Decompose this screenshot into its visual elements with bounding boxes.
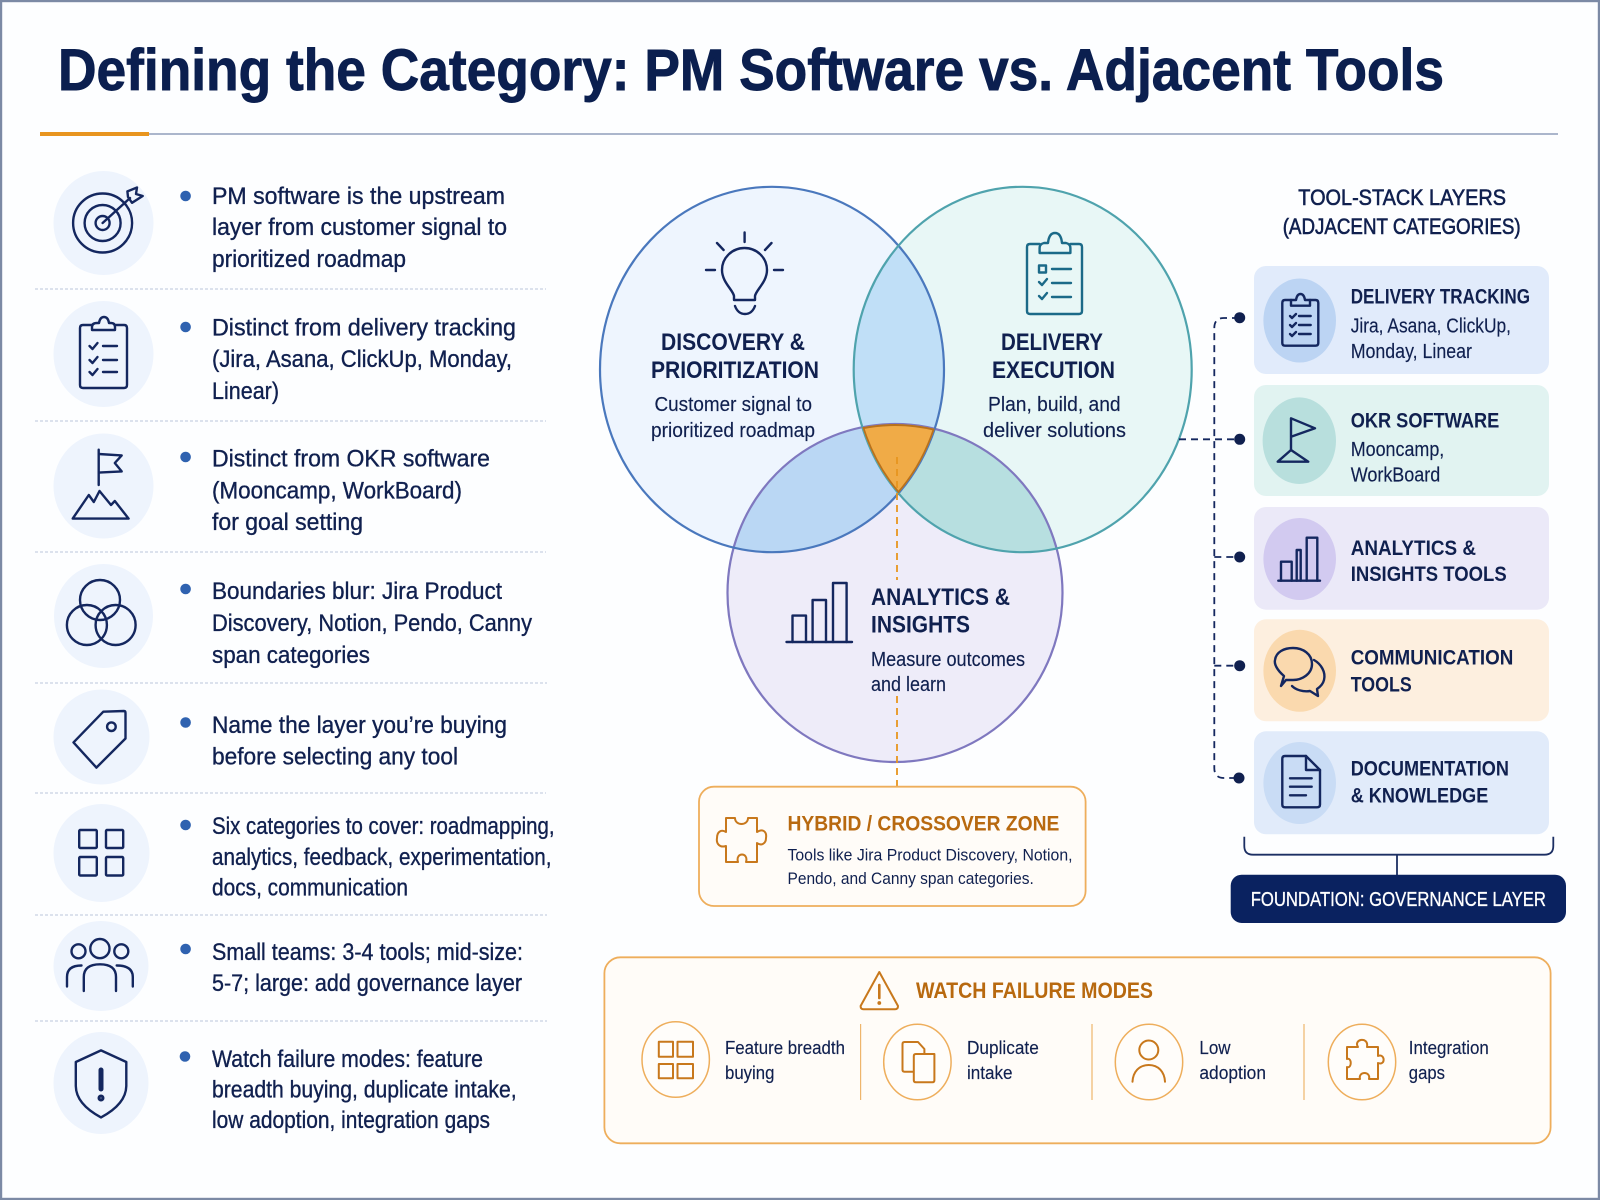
venn: discovery and prioritization: Customer signal to: [654, 394, 812, 416]
point: name the layer: before selecting any tool: [212, 744, 458, 771]
point: upstream layer: PM software is the upstream: [212, 183, 505, 210]
failure mode: duplicate intake: intake: [967, 1062, 1012, 1083]
connector: venn to layer cards: [1179, 312, 1245, 784]
point: OKR software: (Mooncamp, WorkBoard): [212, 478, 462, 505]
point: OKR software: Distinct from OKR software: [212, 446, 490, 472]
icon: four squares grid: [79, 830, 123, 876]
card: communication tools: [1254, 619, 1549, 721]
point: boundaries blur: [54, 564, 532, 669]
failure mode: integration gaps: [1328, 1024, 1489, 1100]
failure mode: low adoption: adoption: [1199, 1062, 1266, 1083]
heading: tool-stack layers: [1283, 185, 1521, 239]
card: delivery tracking: Monday, Linear: [1351, 341, 1472, 363]
failure mode: integration gaps: Integration: [1409, 1037, 1489, 1058]
card: OKR software: Mooncamp,: [1351, 439, 1444, 461]
point: delivery tracking: [54, 301, 516, 407]
point: six categories: [54, 804, 554, 902]
point: failure modes: Watch failure modes: feature: [212, 1046, 483, 1073]
venn: delivery execution: EXECUTION: [992, 357, 1115, 384]
heading: tool-stack layers: TOOL-STACK LAYERS: [1298, 185, 1506, 210]
chart: three-circle venn diagram: [600, 187, 1192, 787]
panel: hybrid crossover zone: Tools like Jira Product Discovery, Notion,: [788, 847, 1072, 865]
card: documentation and knowledge: [1254, 731, 1549, 834]
failure mode: feature breadth buying: buying: [725, 1062, 774, 1083]
venn: analytics and insights: [786, 583, 1025, 696]
icon: flag on mountain: [73, 450, 129, 519]
foundation: governance layer: FOUNDATION: GOVERNANCE LAYER: [1251, 889, 1546, 911]
venn: analytics and insights: Measure outcomes: [871, 649, 1025, 671]
callout connector: overlap to hybrid zone: [896, 457, 898, 787]
icon: bars: [1278, 538, 1320, 581]
point: six categories: docs, communication: [212, 874, 408, 902]
point: upstream layer: [54, 171, 507, 275]
point: failure modes: breadth buying, duplicate intake,: [212, 1076, 517, 1104]
point: boundaries blur: Boundaries blur: Jira Product: [212, 578, 502, 605]
card: communication tools: TOOLS: [1351, 674, 1412, 697]
venn: discovery and prioritization: [651, 232, 819, 442]
panel: hybrid crossover zone: [699, 787, 1086, 906]
card: delivery tracking: DELIVERY TRACKING: [1351, 285, 1530, 308]
point: boundaries blur: span categories: [212, 642, 370, 669]
failure mode: duplicate intake: Duplicate: [967, 1037, 1039, 1058]
icon: duplicate documents: [902, 1042, 934, 1082]
point: name the layer: [54, 690, 507, 784]
icon: light bulb: [706, 232, 783, 314]
failure mode: feature breadth buying: [642, 1022, 845, 1097]
venn: discovery and prioritization: prioritized roadmap: [651, 420, 815, 442]
icon: puzzle piece: [717, 818, 766, 862]
card: documentation and knowledge: & KNOWLEDGE: [1351, 784, 1488, 807]
icon: chat bubbles: [1275, 648, 1324, 696]
icon: target with arrow: [73, 188, 143, 252]
failure mode: low adoption: Low: [1199, 1037, 1231, 1058]
card: OKR software: [1254, 385, 1549, 496]
panel: key points list: [35, 171, 554, 1134]
icon: overlapping circles: [67, 580, 136, 645]
point: failure modes: low adoption, integration gaps: [212, 1107, 490, 1134]
panel: watch failure modes: [604, 957, 1551, 1143]
point: upstream layer: layer from customer signal to: [212, 214, 507, 241]
panel: tool-stack layers: [1179, 185, 1566, 923]
foundation: governance layer: [1231, 875, 1566, 923]
point: six categories: analytics, feedback, experimentation,: [212, 844, 552, 871]
point: upstream layer: prioritized roadmap: [212, 246, 406, 273]
icon: warning triangle: [861, 972, 898, 1009]
panel: hybrid crossover zone: Pendo, and Canny span categories.: [788, 870, 1034, 888]
venn: discovery and prioritization: PRIORITIZATION: [651, 357, 819, 384]
card: communication tools: COMMUNICATION: [1351, 646, 1513, 669]
point: failure modes: [54, 1032, 517, 1134]
failure mode: feature breadth buying: Feature breadth: [725, 1037, 845, 1058]
venn: analytics and insights: and learn: [871, 674, 946, 696]
icon: price tag: [74, 711, 126, 768]
point: boundaries blur: Discovery, Notion, Pendo, Canny: [212, 610, 532, 637]
point: OKR software: for goal setting: [212, 509, 363, 536]
icon: small puzzle piece: [1347, 1040, 1384, 1079]
icon: flag on base: [1278, 418, 1315, 462]
venn: delivery execution: [983, 233, 1126, 442]
icon: document: [1282, 756, 1320, 807]
point: team sizes: Small teams: 3-4 tools; mid-size:: [212, 939, 523, 966]
icon: shield with exclamation: [76, 1050, 126, 1117]
panel: hybrid crossover zone: HYBRID / CROSSOVER ZONE: [788, 813, 1059, 836]
card: documentation and knowledge: DOCUMENTATION: [1351, 757, 1509, 780]
icon: three people: [67, 939, 133, 991]
card: analytics and insights tools: ANALYTICS &: [1351, 537, 1476, 560]
point: team sizes: [54, 921, 523, 1011]
point: team sizes: 5-7; large: add governance layer: [212, 970, 522, 997]
icon: bar chart: [786, 583, 852, 642]
venn: discovery and prioritization: DISCOVERY &: [661, 329, 805, 356]
venn: analytics and insights: ANALYTICS &: [871, 584, 1010, 611]
card: analytics and insights tools: INSIGHTS TOOLS: [1351, 563, 1507, 586]
icon: person: [1132, 1040, 1165, 1082]
card: delivery tracking: [1254, 266, 1549, 374]
title rule: [40, 132, 1558, 136]
icon: clipboard: [1282, 294, 1318, 346]
card: delivery tracking: Jira, Asana, ClickUp,: [1351, 316, 1511, 338]
point: delivery tracking: Distinct from delivery tracking: [212, 315, 516, 342]
point: delivery tracking: Linear): [212, 378, 279, 405]
point: six categories: Six categories to cover: roadmapping,: [212, 813, 554, 840]
venn: delivery execution: Plan, build, and: [988, 394, 1121, 416]
point: name the layer: Name the layer you’re buying: [212, 712, 507, 739]
venn: delivery execution: deliver solutions: [983, 420, 1126, 442]
failure mode: low adoption: [1115, 1024, 1266, 1100]
panel: watch failure modes: WATCH FAILURE MODES: [916, 978, 1153, 1003]
hybrid center overlap: [862, 424, 935, 494]
point: delivery tracking: (Jira, Asana, ClickUp, Monday,: [212, 346, 512, 373]
card: analytics and insights tools: [1254, 507, 1549, 610]
card: OKR software: WorkBoard: [1351, 465, 1440, 487]
icon: teal clipboard: [1027, 233, 1082, 314]
venn: delivery execution: DELIVERY: [1001, 329, 1103, 356]
point: OKR software: [54, 434, 490, 538]
icon: clipboard checklist: [80, 317, 127, 388]
bracket: cards to foundation: [1244, 837, 1553, 875]
icon: orange grid: [659, 1042, 693, 1078]
failure mode: duplicate intake: [884, 1024, 1039, 1100]
venn: analytics and insights: INSIGHTS: [871, 612, 970, 639]
heading: tool-stack layers: (ADJACENT CATEGORIES): [1283, 214, 1521, 239]
card: OKR software: OKR SOFTWARE: [1351, 410, 1499, 433]
title: Defining the Category: PM Software vs. Adjacent Tools: [58, 38, 1444, 103]
failure mode: integration gaps: gaps: [1409, 1062, 1445, 1083]
